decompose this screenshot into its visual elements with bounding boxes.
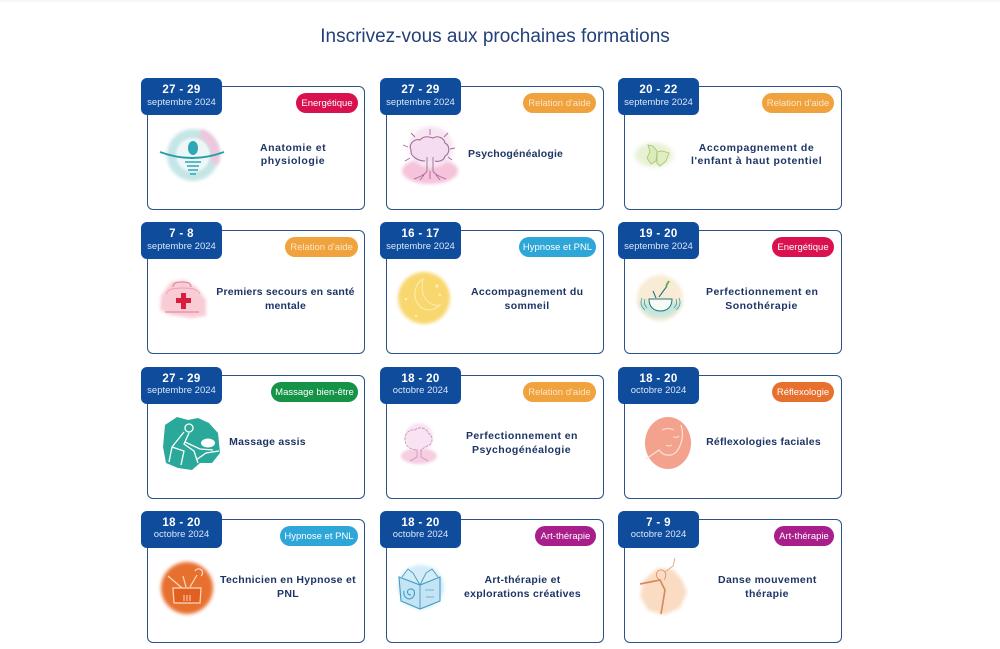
date tab bbox=[618, 78, 699, 115]
category badge bbox=[772, 237, 834, 257]
date tab bbox=[380, 367, 461, 404]
category badge: Art-thérapie bbox=[779, 531, 829, 542]
category badge: Réflexologie bbox=[777, 387, 829, 398]
date tab: septembre 2024 bbox=[147, 96, 216, 108]
panel: Accompagnement de l'enfant à haut potentiel bbox=[618, 78, 842, 210]
icon: body in circle bbox=[160, 128, 224, 182]
panel: Premiers secours en santé mentale bbox=[141, 222, 365, 354]
date tab: septembre 2024 bbox=[624, 241, 693, 252]
course title: thérapie bbox=[745, 588, 789, 600]
date tab: 20 - 22 bbox=[639, 84, 678, 96]
panel: Perfectionnement en Psychogénéalogie bbox=[380, 367, 604, 499]
date tab bbox=[141, 511, 222, 548]
category badge bbox=[280, 526, 358, 546]
course title: Accompagnement du bbox=[471, 286, 583, 298]
course title: Danse mouvement bbox=[718, 574, 817, 586]
date tab: 18 - 20 bbox=[401, 373, 440, 385]
date tab bbox=[141, 367, 222, 404]
course title: physiologie bbox=[261, 155, 325, 167]
course title: Réflexologies faciales bbox=[706, 436, 821, 448]
category badge bbox=[523, 382, 596, 402]
course title: Sonothérapie bbox=[725, 300, 798, 312]
category badge bbox=[774, 526, 834, 546]
course title bbox=[691, 142, 822, 167]
category badge bbox=[519, 237, 596, 257]
icon: open book bbox=[396, 564, 446, 610]
course title: Psychogénéalogie bbox=[468, 148, 563, 160]
date tab: 7 - 8 bbox=[169, 228, 194, 240]
category badge bbox=[285, 237, 358, 257]
date tab: 7 - 9 bbox=[646, 517, 671, 529]
course title: mentale bbox=[265, 300, 306, 312]
course title: Anatomie et bbox=[260, 142, 326, 154]
course title bbox=[706, 286, 818, 312]
date tab: septembre 2024 bbox=[147, 385, 216, 396]
category badge: Relation d'aide bbox=[528, 387, 591, 398]
icon: tree bbox=[400, 126, 460, 186]
date tab bbox=[141, 222, 222, 259]
icon: face bbox=[645, 417, 691, 469]
category badge bbox=[296, 93, 358, 113]
date tab: 27 - 29 bbox=[162, 84, 201, 96]
course title: Perfectionnement en bbox=[466, 430, 578, 442]
category badge: Hypnose et PNL bbox=[284, 531, 354, 542]
category badge: Massage bien-être bbox=[275, 387, 354, 398]
category badge: Energétique bbox=[301, 98, 353, 109]
category badge bbox=[762, 93, 834, 113]
date tab: octobre 2024 bbox=[631, 529, 686, 540]
category badge: Energétique bbox=[777, 242, 829, 253]
panel: Art-thérapie et explorations créatives bbox=[380, 511, 604, 643]
icon: singing bowl bbox=[636, 274, 684, 322]
date tab: septembre 2024 bbox=[386, 241, 455, 252]
category badge: Relation d'aide bbox=[528, 98, 591, 109]
category badge: Art-thérapie bbox=[541, 531, 590, 542]
date tab bbox=[141, 78, 222, 115]
panel: Anatomie et physiologie bbox=[141, 78, 365, 210]
title: Inscrivez-vous aux prochaines formations bbox=[320, 26, 670, 46]
date tab: octobre 2024 bbox=[393, 529, 448, 540]
date tab bbox=[618, 367, 699, 404]
course title bbox=[718, 574, 817, 600]
panel: Danse mouvement thérapie bbox=[618, 511, 842, 643]
course title: Perfectionnement en bbox=[706, 286, 818, 298]
panel: Massage assis bbox=[141, 367, 365, 499]
category badge bbox=[772, 382, 834, 402]
course title bbox=[471, 286, 583, 312]
date tab bbox=[380, 511, 461, 548]
panel: Réflexologies faciales bbox=[618, 367, 842, 499]
date tab: octobre 2024 bbox=[154, 529, 209, 540]
date tab: septembre 2024 bbox=[386, 96, 455, 108]
category badge bbox=[523, 93, 596, 113]
date tab: 27 - 29 bbox=[401, 84, 440, 96]
course title: explorations créatives bbox=[464, 588, 581, 600]
course title: l'enfant à haut potentiel bbox=[691, 155, 822, 167]
course title: Massage assis bbox=[229, 436, 306, 448]
date tab bbox=[380, 78, 461, 115]
category badge bbox=[535, 526, 596, 546]
course title: Accompagnement de bbox=[699, 142, 814, 154]
course title: Psychogénéalogie bbox=[472, 444, 571, 456]
date tab: octobre 2024 bbox=[631, 385, 686, 396]
date tab: 18 - 20 bbox=[401, 517, 440, 529]
category badge bbox=[271, 382, 358, 402]
icon: seated massage bbox=[163, 417, 220, 470]
icon: small tree bbox=[400, 422, 438, 465]
date tab: septembre 2024 bbox=[624, 96, 693, 108]
icon: first aid bag bbox=[158, 278, 208, 320]
date tab bbox=[618, 222, 699, 259]
course title bbox=[220, 574, 356, 600]
category badge: Hypnose et PNL bbox=[523, 242, 592, 253]
date tab: 27 - 29 bbox=[162, 373, 201, 385]
course title: Premiers secours en santé bbox=[216, 286, 355, 298]
panel: Perfectionnement en Sonothérapie bbox=[618, 222, 842, 354]
panel: Technicien en Hypnose et PNL bbox=[141, 511, 365, 643]
course title: Art-thérapie et bbox=[485, 574, 560, 586]
course title: Technicien en Hypnose et bbox=[220, 574, 356, 586]
date tab: 19 - 20 bbox=[639, 228, 678, 240]
icon: butterfly bbox=[634, 141, 674, 169]
category badge: Relation d'aide bbox=[290, 242, 353, 253]
date tab: septembre 2024 bbox=[147, 241, 216, 252]
course title bbox=[216, 286, 355, 312]
course title bbox=[260, 142, 326, 167]
date tab: 18 - 20 bbox=[639, 373, 678, 385]
course title bbox=[464, 574, 581, 600]
date tab: octobre 2024 bbox=[393, 385, 448, 396]
date tab: 16 - 17 bbox=[401, 228, 440, 240]
date tab bbox=[380, 222, 461, 259]
course title bbox=[466, 430, 578, 456]
date tab: 18 - 20 bbox=[162, 517, 201, 529]
icon: tool box bbox=[158, 559, 216, 617]
date tab bbox=[618, 511, 699, 548]
course title: sommeil bbox=[505, 300, 549, 312]
panel: Psychogénéalogie bbox=[380, 78, 604, 210]
icon: moon bbox=[396, 270, 452, 326]
category badge: Relation d'aide bbox=[767, 98, 829, 109]
panel: Accompagnement du sommeil bbox=[380, 222, 604, 354]
course title: PNL bbox=[277, 588, 299, 600]
icon: dancer bbox=[638, 558, 688, 616]
